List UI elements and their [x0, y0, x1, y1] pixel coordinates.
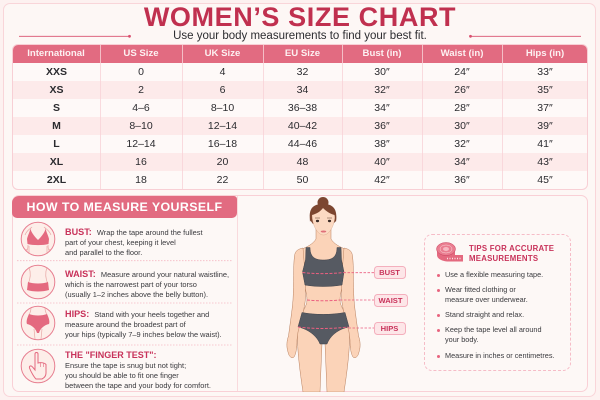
- tips list: Keep the tape level all around: [445, 325, 542, 334]
- table rows: L: [53, 138, 60, 150]
- how to measure heading: HOW TO MEASURE YOURSELF: [26, 200, 222, 214]
- table header: [12, 44, 588, 63]
- table rows: 45″: [537, 174, 553, 186]
- finger test text: Ensure the tape is snug but not tight;: [65, 361, 186, 370]
- table rows: XXS: [46, 66, 67, 78]
- left arm: [287, 248, 306, 358]
- tips list: Stand straight and relax.: [445, 310, 524, 319]
- table rows: 22: [217, 174, 228, 186]
- table rows: M: [52, 120, 61, 132]
- divider: [237, 196, 238, 391]
- table rows: 26″: [454, 84, 470, 96]
- label: bust: BUST: [379, 268, 400, 277]
- hips text: your hips (typically 7–9 inches below the waist).: [65, 330, 222, 339]
- table rows: 0: [138, 66, 144, 78]
- table rows: 44–46: [288, 138, 317, 150]
- table rows: 4–6: [132, 102, 150, 114]
- hips text: [65, 309, 222, 339]
- table rows: 36″: [374, 120, 390, 132]
- tips list: measure over underwear.: [445, 295, 528, 304]
- bust text: part of your chest, keeping it level: [65, 238, 176, 247]
- icon: waist: [20, 264, 56, 300]
- table header: Waist (in): [441, 48, 483, 59]
- right arm: [342, 248, 360, 358]
- table rows: 48: [297, 156, 308, 168]
- table rows: 6: [220, 84, 225, 96]
- table rows: 12–14: [126, 138, 156, 150]
- tips panel: [424, 234, 571, 371]
- fringe: [310, 206, 336, 222]
- table rows: 39″: [537, 120, 553, 132]
- table rows: 2: [138, 84, 144, 96]
- finger test text: you should be able to fit one finger: [65, 371, 179, 380]
- tips list: Use a flexible measuring tape.: [445, 270, 543, 279]
- table rows: 32: [297, 66, 308, 78]
- tips heading: [469, 244, 554, 263]
- table rows: 36–38: [288, 102, 317, 114]
- table rows: 32″: [454, 138, 470, 150]
- table rows: 43″: [537, 156, 553, 168]
- waist text: [65, 268, 229, 299]
- table rows: 4: [220, 66, 225, 78]
- tips list: your body.: [445, 335, 479, 344]
- decorative title rules: [19, 34, 581, 38]
- tips list: [437, 270, 554, 360]
- table rows: 16: [135, 156, 147, 168]
- hair bun and back hair: [310, 197, 336, 224]
- title: WOMEN’S SIZE CHART: [144, 2, 456, 32]
- icon: finger test: [20, 348, 56, 384]
- lower panel: [12, 195, 588, 392]
- table rows: 30″: [454, 120, 470, 132]
- table rows: 50: [297, 174, 308, 186]
- table header: UK Size: [205, 48, 240, 59]
- table rows: 34″: [374, 102, 390, 114]
- table rows: 35″: [537, 84, 553, 96]
- how to measure heading: [12, 196, 237, 218]
- waist text: (usually 1–2 inches above the belly button).: [65, 290, 208, 299]
- table rows: 38″: [374, 138, 390, 150]
- table rows: 37″: [537, 102, 553, 114]
- table header: US Size: [123, 48, 159, 59]
- finger test text: THE "FINGER TEST":: [65, 350, 157, 360]
- table rows: S: [53, 102, 60, 114]
- label: hips: [374, 322, 406, 335]
- table rows: 33″: [537, 66, 553, 78]
- table rows: 42″: [374, 174, 390, 186]
- table header: Bust (in): [363, 48, 401, 59]
- tips heading: MEASUREMENTS: [469, 254, 538, 263]
- subtitle: Use your body measurements to find your best fit.: [173, 30, 427, 42]
- table header: EU Size: [285, 48, 320, 59]
- table rows: XL: [50, 156, 63, 168]
- top garment: [302, 248, 344, 286]
- legs and torso: [297, 228, 350, 392]
- label: waist: WAIST: [378, 296, 403, 305]
- waist text: which is the narrowest part of your torso: [65, 280, 197, 289]
- bust text: and parallel to the floor.: [65, 248, 142, 257]
- table rows: 40″: [374, 156, 390, 168]
- label: waist: [374, 294, 408, 307]
- icon: bust: [20, 222, 56, 256]
- bust text: BUST: Wrap the tape around the fullest: [65, 226, 203, 236]
- tips list: Wear fitted clothing or: [445, 285, 516, 294]
- table rows: 40–42: [288, 120, 317, 132]
- hips text: HIPS: Stand with your heels together and: [65, 309, 209, 319]
- table rows: 24″: [454, 66, 470, 78]
- finger test text: [65, 350, 211, 390]
- table rows: 34: [297, 84, 308, 96]
- row separators: [17, 260, 232, 346]
- icon: hips: [20, 306, 56, 340]
- table rows: 28″: [454, 102, 470, 114]
- briefs: [298, 312, 349, 344]
- table header: Hips (in): [526, 48, 564, 59]
- table rows: 8–10: [211, 102, 234, 114]
- table rows: 36″: [454, 174, 470, 186]
- figure with measuring lines: [286, 197, 374, 392]
- face: [312, 208, 335, 235]
- table rows: 2XL: [47, 174, 66, 186]
- hips text: measure around the broadest part of: [65, 320, 186, 329]
- table rows: 34″: [454, 156, 470, 168]
- tips heading: TIPS FOR ACCURATE: [469, 244, 554, 253]
- tips list: Measure in inches or centimetres.: [445, 351, 554, 360]
- table rows: XS: [49, 84, 64, 96]
- waist text: WAIST: Measure around your natural waistline,: [65, 268, 229, 278]
- table rows: 18: [135, 174, 147, 186]
- table rows: [13, 45, 587, 189]
- table rows: 12–14: [208, 120, 237, 132]
- label: hips: HIPS: [381, 324, 398, 333]
- label: bust: [374, 266, 406, 279]
- table rows: 16–18: [208, 138, 237, 150]
- finger test text: between the tape and your body for comfort.: [65, 381, 211, 390]
- table rows: 30″: [374, 66, 390, 78]
- table rows: 8–10: [129, 120, 153, 132]
- table rows: 32″: [374, 84, 390, 96]
- tape lines: [298, 272, 348, 328]
- bust text: [65, 226, 203, 257]
- icon: measuring tape: [436, 242, 463, 262]
- table rows: 41″: [537, 138, 553, 150]
- table header: International: [27, 48, 85, 59]
- size table: [12, 44, 588, 190]
- facial features: [315, 218, 332, 232]
- table rows: 20: [217, 156, 228, 168]
